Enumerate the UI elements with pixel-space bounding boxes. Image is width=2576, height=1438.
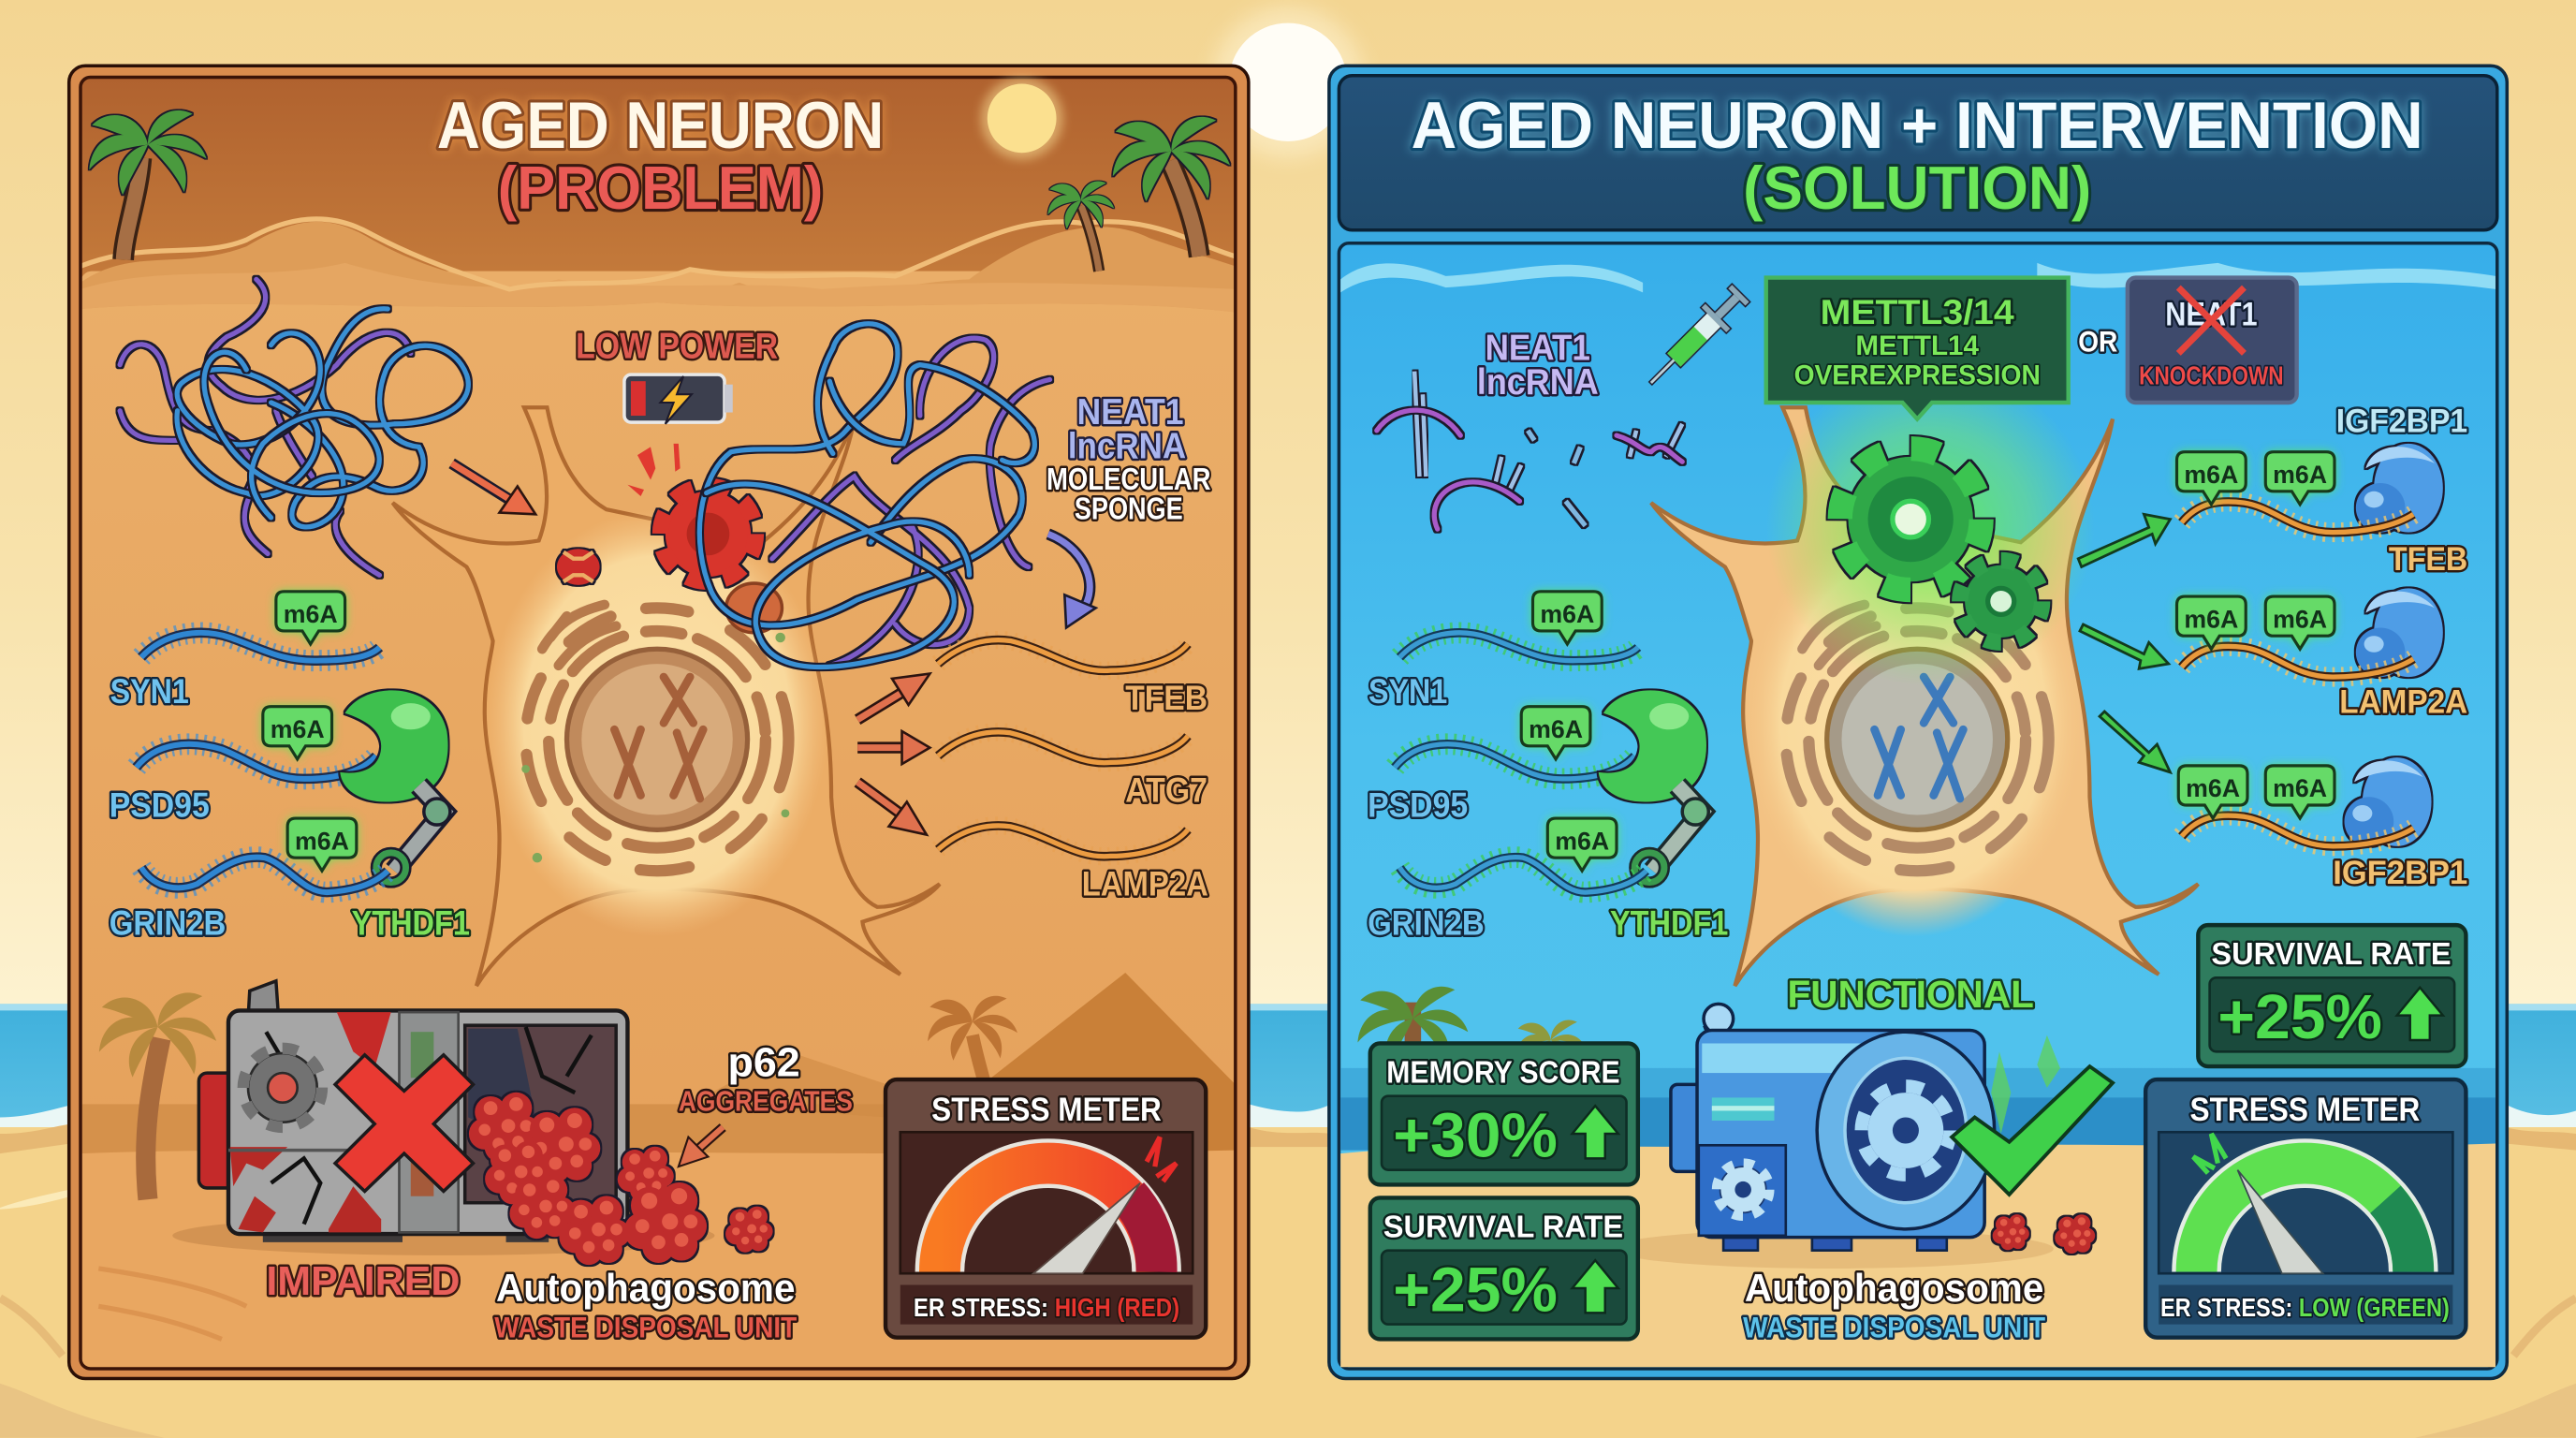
card: survival rate bottom: +25% — [1393, 1256, 1558, 1326]
icon: small green gear — [1960, 560, 2042, 642]
p62 clusters — [469, 1093, 773, 1265]
machine: functional autophagosome — [1671, 1004, 1995, 1251]
label NEAT1 lncRNA sponge — [1046, 392, 1211, 527]
panel: aged neuron problem — [69, 66, 1249, 1379]
row: TFEB mRNA with m6A and ribosome: m6A — [2184, 460, 2238, 489]
label autophagosome right: Autophagosome — [1745, 1266, 2043, 1310]
panel: aged neuron intervention solution — [1329, 66, 2507, 1379]
small red organelle — [557, 549, 600, 585]
gauge low — [2159, 1132, 2452, 1273]
card: survival rate top — [2198, 925, 2466, 1066]
callout: NEAT1 knockdown: KNOCKDOWN — [2139, 361, 2284, 390]
row: TFEB mRNA with m6A and ribosome — [2177, 444, 2443, 533]
palm tree bottom left — [99, 992, 216, 1199]
mRNA SYN1 left — [141, 633, 379, 661]
left panel scenery — [80, 77, 1236, 1369]
left panel inner border — [80, 77, 1236, 1369]
mRNA PSD95 right — [1395, 744, 1634, 779]
palm tree top right — [1113, 117, 1230, 257]
row: IGF2BP1 mRNA with m6A and ribosome: m6A — [2186, 773, 2240, 802]
gauge high — [900, 1132, 1193, 1273]
label TFEB right: TFEB — [2389, 541, 2467, 578]
icon: broken red gear — [661, 487, 755, 581]
stress meter heading right: STRESS METER — [2190, 1092, 2420, 1128]
row: LAMP2A mRNA with m6A and ribosome: m6A — [2273, 604, 2327, 633]
card: memory score: +30% — [1393, 1102, 1558, 1171]
nucleus left — [567, 649, 748, 829]
mRNA GRIN2B left — [141, 858, 388, 892]
red x — [335, 1055, 473, 1191]
arrow up — [2397, 988, 2443, 1040]
neuron cell right — [1651, 407, 2198, 986]
label GRIN2B: GRIN2B — [110, 904, 226, 943]
label YTHDF1 right: YTHDF1 — [1610, 904, 1728, 943]
right panel scenery — [1339, 243, 2497, 1369]
label SYN1 right: SYN1 — [1368, 672, 1447, 711]
label IGF2BP1 top: IGF2BP1 — [2336, 404, 2467, 440]
label YTHDF1: YTHDF1 — [352, 904, 470, 943]
callout: METTL overexpression — [1766, 278, 2069, 419]
er stress readout high — [900, 1284, 1193, 1325]
label NEAT1 lncRNA sponge: lncRNA — [1068, 427, 1186, 467]
icon: low battery — [624, 374, 733, 424]
mRNA LAMP2A left — [938, 826, 1188, 857]
card: survival rate bottom: SURVIVAL RATE — [1383, 1211, 1623, 1245]
er stress readout low — [2159, 1284, 2452, 1325]
palm tree top left — [89, 110, 207, 259]
label LAMP2A right: LAMP2A — [2339, 684, 2467, 721]
icon: sun in left panel — [981, 77, 1063, 159]
label TFEB: TFEB — [1125, 679, 1208, 717]
panel frame left — [69, 66, 1249, 1379]
card: memory score — [1370, 1043, 1638, 1184]
title: aged neuron: AGED NEURON — [437, 88, 884, 162]
card: survival rate top: +25% — [2217, 983, 2382, 1052]
row: LAMP2A mRNA with m6A and ribosome — [2177, 588, 2443, 677]
green glow — [1766, 365, 2095, 687]
label NEAT1 lncRNA right — [1477, 328, 1599, 403]
m6A tag GRIN2B: m6A — [295, 826, 349, 855]
label functional: FUNCTIONAL — [1788, 973, 2034, 1016]
label PSD95: PSD95 — [110, 785, 210, 824]
m6A tag PSD95 right: m6A — [1529, 714, 1583, 743]
label ATG7: ATG7 — [1125, 770, 1208, 809]
label p62: p62 — [728, 1040, 800, 1086]
m6A tag SYN1 — [276, 592, 345, 644]
callout: NEAT1 knockdown — [2128, 278, 2297, 403]
row: IGF2BP1 mRNA with m6A and ribosome: m6A — [2273, 773, 2327, 802]
card: memory score: MEMORY SCORE — [1386, 1056, 1620, 1091]
mRNA ATG7 left — [938, 732, 1188, 763]
stress meter high — [886, 1079, 1206, 1338]
label autophagosome: Autophagosome — [496, 1266, 795, 1310]
subtitle: solution: (SOLUTION) — [1743, 154, 2091, 222]
m6A tag SYN1 right: m6A — [1540, 599, 1594, 628]
panel frame right — [1329, 66, 2507, 1379]
small vesicles left — [521, 633, 789, 862]
mitochondrion near gear — [726, 583, 782, 633]
label PSD95 right: PSD95 — [1368, 785, 1468, 824]
stress meter heading: STRESS METER — [931, 1092, 1162, 1128]
er stress readout high: ER STRESS: HIGH (RED) — [914, 1293, 1179, 1322]
endoplasmic reticulum left — [526, 605, 788, 871]
label NEAT1 lncRNA sponge: SPONGE — [1075, 492, 1183, 527]
arrow head into neuron — [452, 463, 535, 514]
small palm tree top right — [1047, 181, 1114, 271]
callout: METTL overexpression: OVEREXPRESSION — [1794, 360, 2041, 391]
NEAT1 fragments — [1377, 372, 1682, 529]
subtitle: problem: (PROBLEM) — [498, 154, 823, 222]
m6A tag GRIN2B right — [1547, 818, 1617, 871]
mRNA GRIN2B right — [1399, 858, 1647, 892]
sun behind panels — [1212, 7, 1364, 157]
label NEAT1 lncRNA right: lncRNA — [1477, 362, 1599, 403]
mRNA TFEB left — [938, 640, 1188, 670]
m6A tag PSD95 — [263, 707, 332, 759]
er stress readout low: ER STRESS: LOW (GREEN) — [2160, 1293, 2450, 1322]
m6A tag GRIN2B — [287, 818, 357, 871]
label NEAT1 lncRNA sponge: NEAT1 — [1076, 392, 1184, 433]
label IGF2BP1 bottom: IGF2BP1 — [2333, 855, 2467, 891]
sparks near broken gear — [627, 444, 681, 496]
callout: METTL overexpression: METTL3/14 — [1821, 293, 2014, 331]
label LAMP2A: LAMP2A — [1082, 865, 1208, 903]
nucleus right — [1827, 649, 2008, 829]
mRNA PSD95 left — [137, 744, 376, 779]
arrow: curved to mRNA — [1048, 534, 1096, 627]
label waste disposal unit right: WASTE DISPOSAL UNIT — [1743, 1311, 2045, 1344]
YTHDF1 reader left — [340, 690, 450, 882]
stress meter low — [2145, 1079, 2466, 1338]
card: survival rate bottom — [1370, 1197, 1638, 1339]
label aggregates: AGGREGATES — [679, 1084, 853, 1117]
row: TFEB mRNA with m6A and ribosome: m6A — [2273, 460, 2327, 489]
m6A tag SYN1: m6A — [284, 599, 338, 628]
title: aged neuron: AGED NEURON — [437, 88, 884, 162]
green wisps — [1991, 1035, 2060, 1134]
arrow to aggregates — [679, 1127, 723, 1167]
silhouette palm bottom — [928, 996, 1017, 1121]
label OR: OR — [2078, 325, 2117, 359]
icon: green check mark — [1952, 1066, 2113, 1195]
tangle: NEAT1 left — [120, 279, 468, 575]
m6A tag PSD95 right — [1521, 707, 1590, 759]
m6A tag GRIN2B right: m6A — [1555, 826, 1609, 855]
palm trees right bottom — [1357, 987, 1586, 1070]
mRNA SYN1 right — [1399, 633, 1638, 661]
callout: METTL overexpression: METTL14 — [1855, 330, 1979, 361]
neuron cell left — [392, 407, 940, 986]
arrow up — [1573, 1260, 1618, 1313]
green arrows — [2078, 514, 2170, 772]
row: LAMP2A mRNA with m6A and ribosome: m6A — [2184, 604, 2238, 633]
title: aged neuron intervention: AGED NEURON + INTERVENTION — [1412, 88, 2423, 162]
arrow up — [1573, 1106, 1618, 1158]
card: survival rate top: SURVIVAL RATE — [2211, 937, 2452, 972]
p62 remnants — [1993, 1214, 2095, 1254]
icon: large green gear — [1840, 448, 1982, 590]
label SYN1: SYN1 — [110, 672, 189, 711]
endoplasmic reticulum right — [1786, 605, 2049, 871]
m6A tag PSD95: m6A — [271, 714, 325, 743]
arrows to mRNA — [857, 674, 929, 835]
tangle: NEAT1 right — [699, 324, 1050, 668]
YTHDF1 reader right — [1599, 690, 1708, 882]
m6A tag SYN1 right — [1533, 592, 1602, 644]
icon: syringe — [1639, 281, 1753, 395]
label impaired: IMPAIRED — [266, 1258, 460, 1304]
label low power: LOW POWER — [576, 327, 778, 367]
title: aged neuron intervention: AGED NEURON + INTERVENTION — [1412, 88, 2423, 162]
callout: NEAT1 knockdown: NEAT1 — [2165, 297, 2258, 333]
label NEAT1 lncRNA right: NEAT1 — [1486, 328, 1590, 368]
row: IGF2BP1 mRNA with m6A and ribosome — [2178, 757, 2432, 846]
machine: broken autophagosome — [172, 981, 773, 1265]
label GRIN2B right: GRIN2B — [1368, 904, 1485, 943]
label NEAT1 lncRNA sponge: MOLECULAR — [1046, 462, 1211, 497]
label waste disposal unit: WASTE DISPOSAL UNIT — [494, 1311, 797, 1344]
arrow into neuron — [452, 463, 522, 507]
header band right — [1339, 76, 2497, 230]
